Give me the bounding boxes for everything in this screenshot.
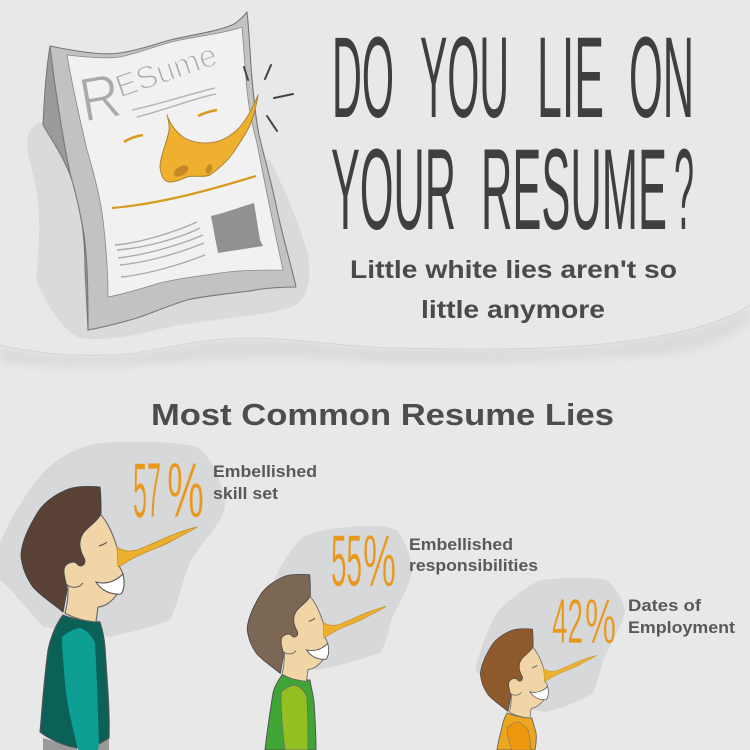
blob: 55% [270,526,412,670]
stat: 42%: % [585,587,616,657]
subtitle: Little white lies aren't so [350,256,677,284]
stat: 57%: % [167,446,204,534]
text lines [115,222,205,277]
stat: 42% [552,587,735,657]
stat: 55% [331,521,538,602]
sleeve [62,628,99,750]
subtitle [350,256,677,324]
person: orange [480,629,597,750]
sleeve [507,722,531,750]
torso [265,675,316,750]
resume handwritten word: ESume [111,36,222,105]
mouth line [112,176,256,208]
torso [40,615,109,748]
infographic canvas: ? [674,126,694,254]
resume handwritten word [74,36,222,136]
pants [43,736,109,750]
label: responsibilities: Embellished [409,535,513,554]
surprise lines [244,65,293,131]
resume page frame [50,12,296,330]
blob: 57% [0,442,225,637]
person: teal [21,487,197,750]
section heading: Most Common Resume Lies [151,397,614,432]
title: LIE [537,14,604,142]
resume handwritten word: R [74,61,126,136]
person: green [247,574,386,750]
stat: 57%: 57 [133,446,161,534]
title: YOU [420,14,509,142]
torso [497,713,536,750]
label: skill set: Embellished [213,462,317,481]
title [331,14,694,254]
sleeve [281,685,308,750]
label: skill set: skill set [213,484,278,503]
label: responsibilities [409,535,538,575]
stat: 55%: % [363,521,396,602]
torn paper edge [0,0,750,367]
nose [160,95,258,182]
label: dates: Employment [628,618,735,637]
blob: 42% [475,578,625,712]
stat: 55%: 55 [331,521,362,602]
label: dates [628,596,735,637]
subtitle: little anymore [421,296,605,324]
resume underlines [132,88,216,117]
eyes [124,110,217,142]
stat: 42%: 42 [552,587,583,657]
label: skill set [213,462,317,503]
label: responsibilities: responsibilities [409,556,538,575]
title: YOUR [331,126,456,254]
title: DO [332,14,394,142]
icon: resume with long nose [27,12,309,339]
photo box [211,203,263,253]
resume page [67,27,283,297]
nostrils [172,163,190,179]
stat: 57% [133,446,317,534]
resume spine [43,46,110,330]
label: dates: Dates of [628,596,701,615]
resume shadow [27,122,309,339]
